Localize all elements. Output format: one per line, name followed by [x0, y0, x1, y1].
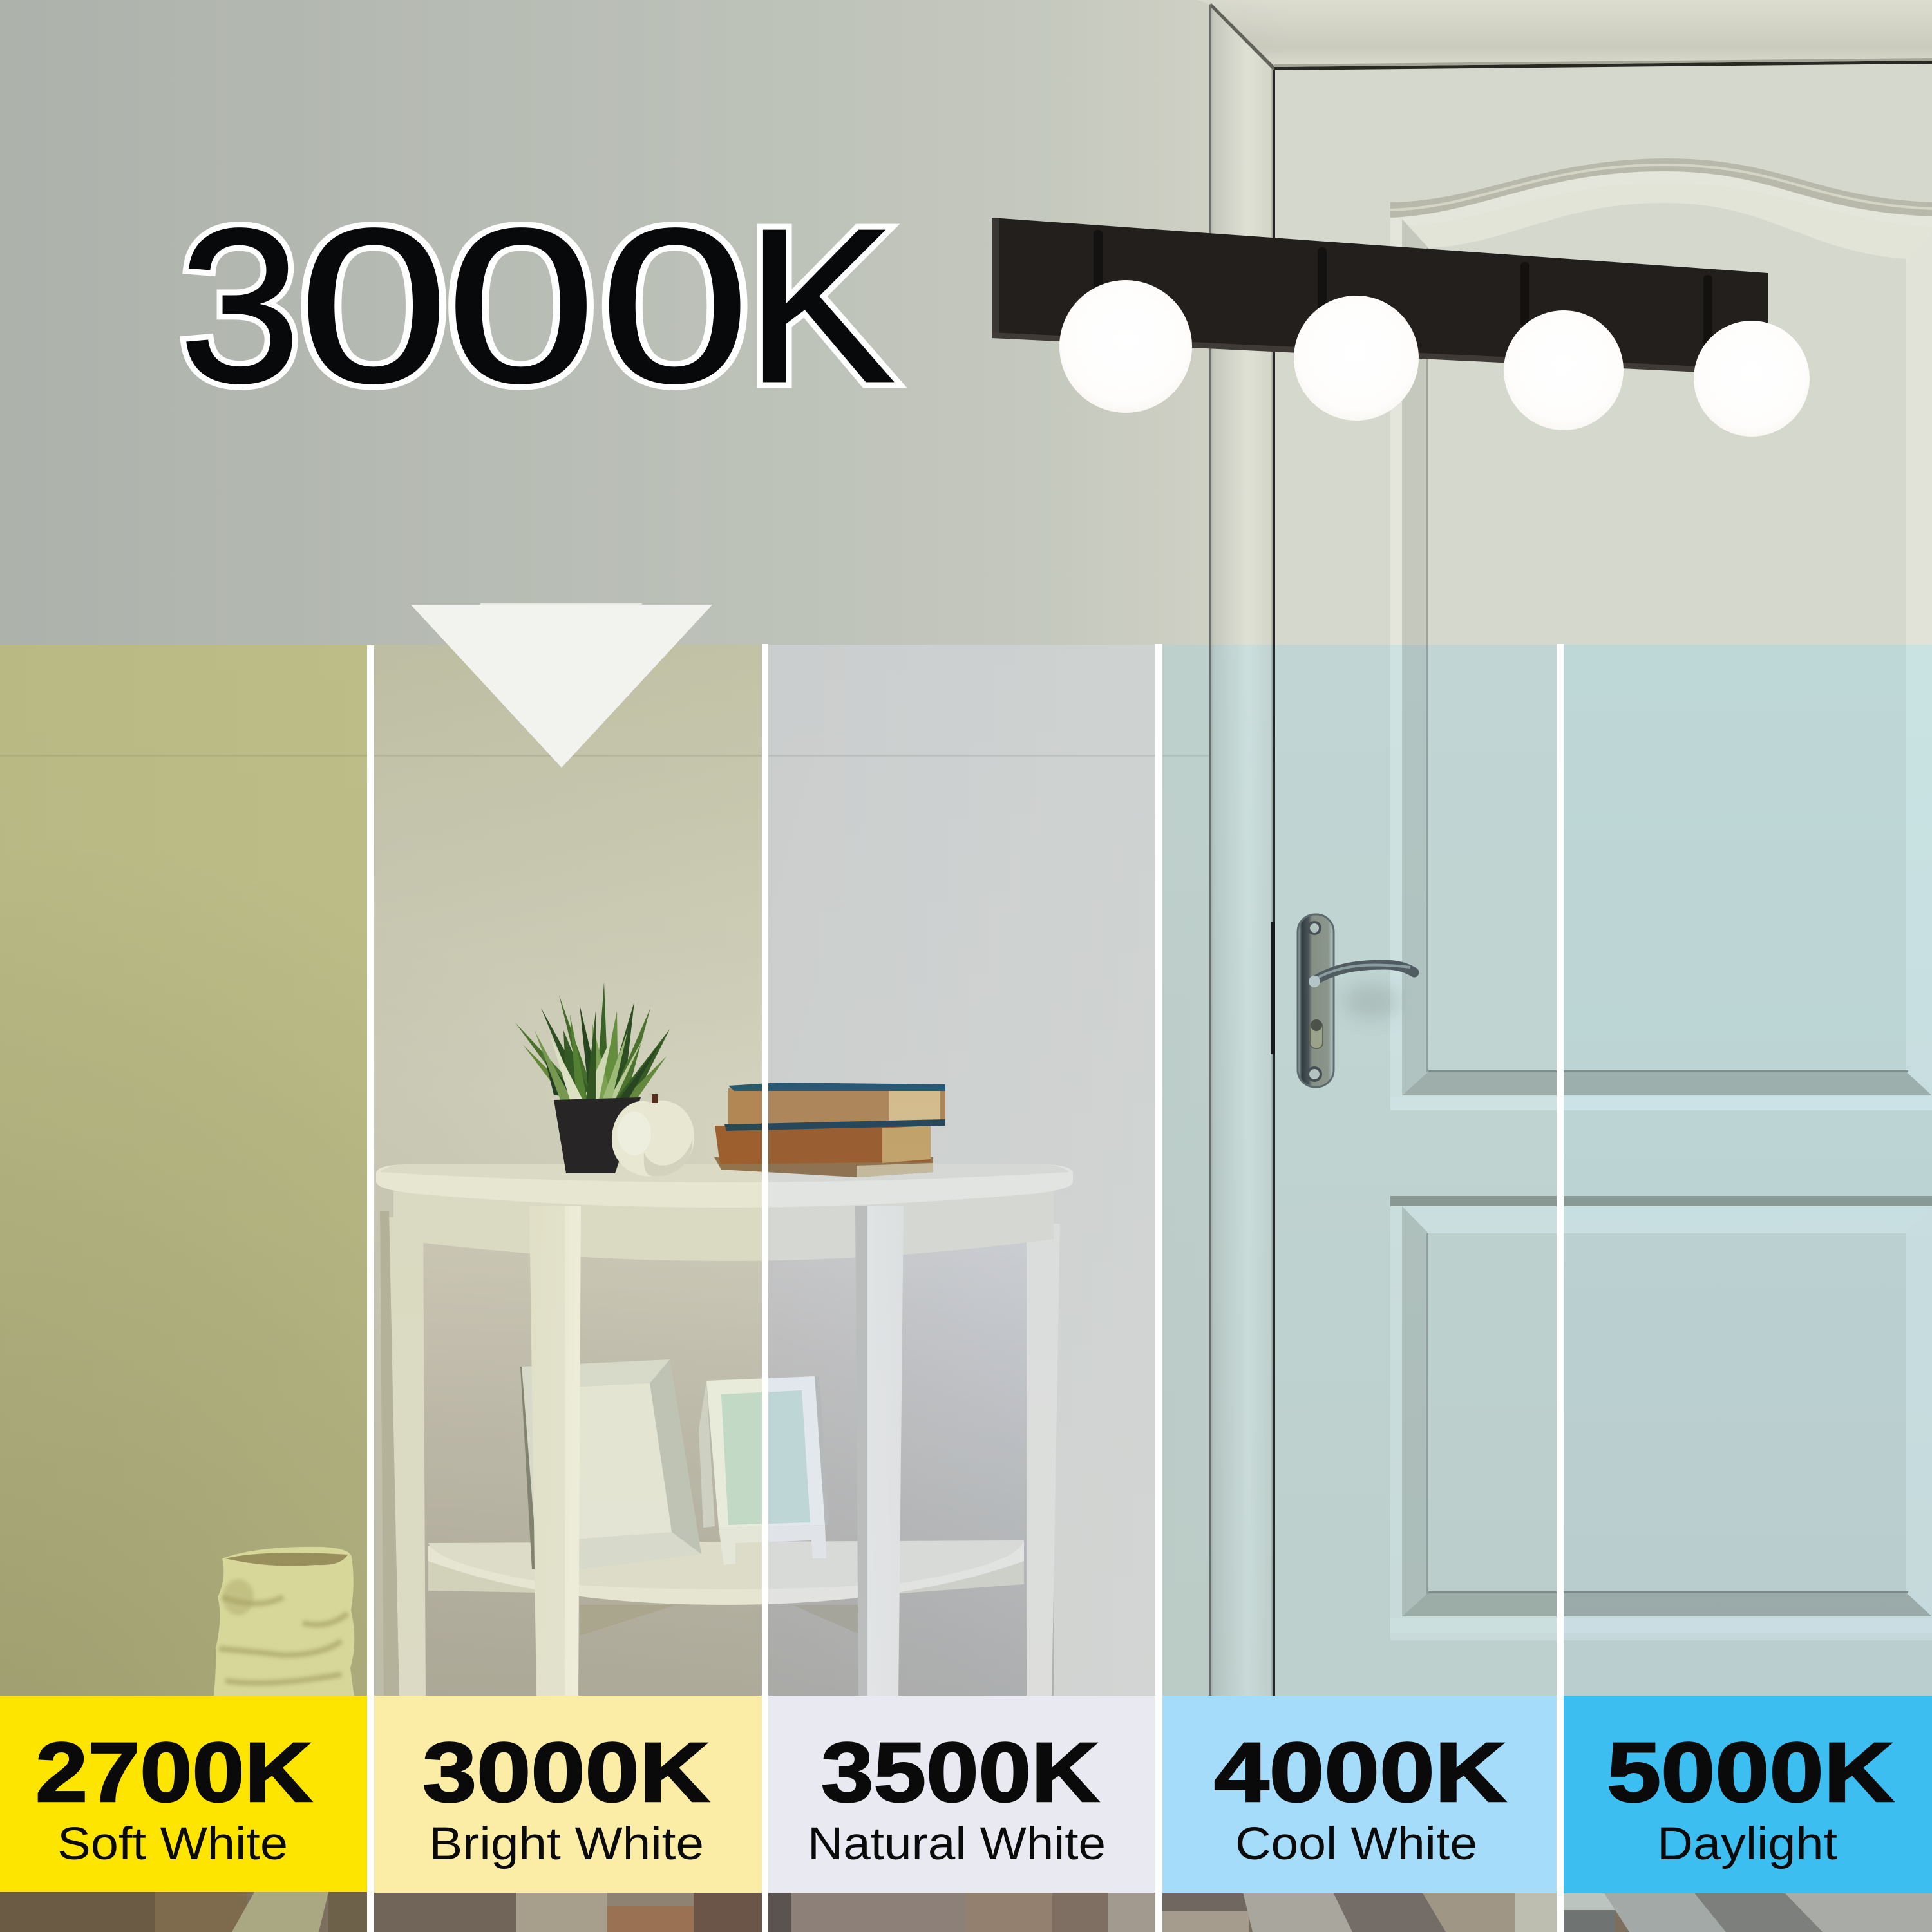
swatch: 3000K Bright White: 3000K — [422, 1725, 710, 1819]
rods — [1094, 230, 1712, 346]
shadowed wall under table — [393, 1239, 1054, 1713]
door casing — [1198, 0, 1932, 1705]
column tint: 3000K — [370, 645, 765, 1932]
swatch: 4000K Cool White: Cool White — [1235, 1819, 1477, 1870]
swatch: 3500K Natural White: Natural White — [808, 1819, 1106, 1870]
globe 1 — [1059, 280, 1192, 413]
main heading: 3000K: 3 — [179, 184, 301, 428]
pot — [554, 1097, 641, 1173]
swatch: 4000K Cool White: 4000K — [1214, 1725, 1506, 1819]
main heading: 3000K: K — [746, 183, 895, 428]
swatch: 3500K Natural White: 3500K — [821, 1725, 1099, 1819]
column tint: 4000K — [1159, 645, 1560, 1932]
backplate — [992, 218, 1768, 375]
table top — [376, 1164, 1073, 1208]
divider lines between color temperatures — [367, 644, 1564, 1932]
globe 3 — [1504, 310, 1624, 430]
swatch: 5000K Daylight: Daylight — [1657, 1819, 1837, 1870]
globe 4 — [1694, 321, 1810, 437]
globe 2 — [1294, 296, 1419, 421]
lower door panel — [1390, 1196, 1932, 1640]
column tint: 2700K — [0, 645, 370, 1932]
upper door panel — [1390, 158, 1932, 1110]
swatch: 2700K Soft White — [0, 1696, 367, 1892]
lower shelf — [428, 1540, 1024, 1636]
swatch: 5000K Daylight: 5000K — [1607, 1725, 1894, 1819]
column tint: 3500K — [765, 645, 1159, 1932]
picture frame: ornate silver — [520, 1359, 701, 1569]
main heading: 3000K: 000 — [299, 183, 750, 428]
top neutral photo area tint — [0, 0, 1932, 645]
swatch: 5000K Daylight — [1564, 1696, 1932, 1893]
swatch: 2700K Soft White: Soft White — [57, 1819, 288, 1870]
console table — [376, 982, 1073, 1713]
potted plant — [515, 982, 670, 1173]
main heading: 3000K: 000 — [299, 183, 750, 428]
door handle — [1298, 914, 1414, 1087]
swatch: 3000K Bright White — [374, 1696, 762, 1893]
grass blades — [515, 982, 670, 1103]
column tint: 5000K — [1560, 645, 1932, 1932]
apple figurine — [612, 1094, 694, 1176]
door — [1271, 58, 1932, 1739]
main heading: 3000K — [179, 183, 895, 428]
ceramic vase — [213, 1547, 355, 1707]
main heading: 3000K: 3 — [179, 184, 301, 428]
swatch: 2700K Soft White: 2700K — [35, 1725, 312, 1819]
swatch: 3500K Natural White — [768, 1696, 1155, 1893]
stack of books — [714, 1083, 945, 1177]
front legs — [529, 1206, 904, 1700]
light fixture — [992, 218, 1810, 437]
swatch: 4000K Cool White — [1162, 1696, 1557, 1893]
wood floor — [0, 1892, 1932, 1932]
apron — [393, 1191, 1054, 1261]
selected temperature triangle marker — [411, 603, 712, 768]
swatch: 3000K Bright White: Bright White — [429, 1819, 704, 1870]
outer rear legs — [380, 1211, 1060, 1700]
picture frame: white easel — [699, 1376, 829, 1565]
main heading: 3000K: K — [746, 183, 895, 428]
